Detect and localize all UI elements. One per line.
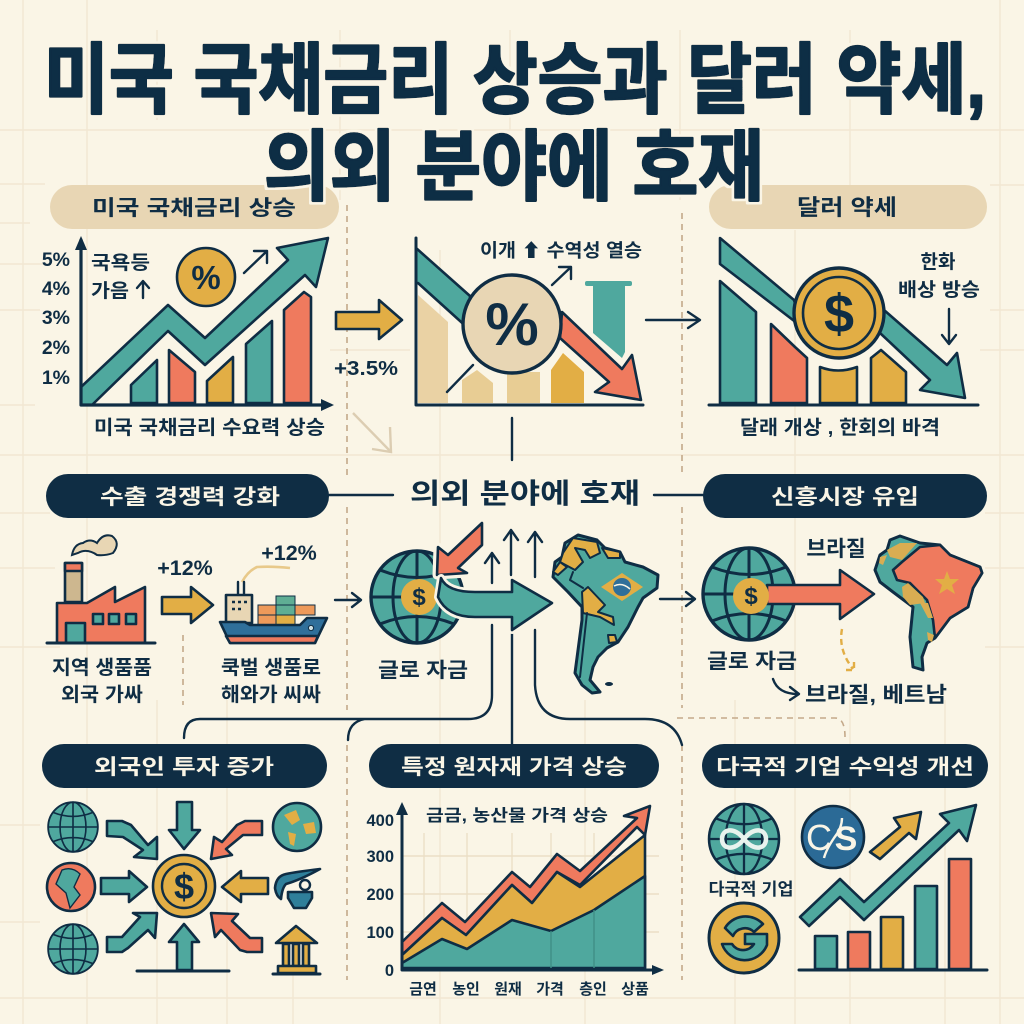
- arrow: down: [942, 309, 956, 344]
- arrow: coral inflow: [437, 523, 482, 575]
- icon: dollar: [733, 578, 769, 614]
- heading pill: multinationals: [702, 744, 988, 788]
- note: won: [898, 251, 980, 301]
- chart: falling price: [416, 238, 643, 405]
- arrows: investment inflow: [101, 802, 268, 971]
- arrow: coral to Brazil: [767, 570, 874, 619]
- chart: rising yield: 5%: [42, 249, 70, 271]
- chart: commodity area: 300: [366, 848, 394, 866]
- note: won: 한화: [921, 251, 955, 273]
- caption: global goods: 쿡벌 생품로: [221, 657, 321, 679]
- panel: global funds flow: [371, 523, 658, 693]
- heading pill: weak dollar: 달러 약세: [797, 195, 897, 220]
- label: Brazil Vietnam: 브라질, 베트남: [805, 683, 947, 707]
- panel: multinational profits: [702, 744, 988, 973]
- arrows: small up: [485, 530, 542, 583]
- arrow: to globe: [335, 593, 361, 607]
- line: ship smoke: [242, 567, 290, 582]
- chart: rising yield: 4%: [42, 278, 70, 300]
- map: South America coral: [875, 536, 982, 670]
- chart: commodity area: 원재: [494, 981, 522, 998]
- icon: percent badge: %: [191, 259, 221, 296]
- center heading: 의외 분야에 호재: [410, 478, 640, 509]
- caption: local goods: [52, 657, 152, 706]
- label: +12%: +12%: [157, 556, 213, 580]
- heading pill: foreign investment: [42, 744, 327, 788]
- chart: commodity area: 0: [385, 962, 394, 980]
- panel: foreign investment: [42, 744, 327, 974]
- panel: emerging market inflow: [703, 474, 987, 707]
- icon: central coin: [153, 855, 215, 917]
- chart: rising yield: 2%: [42, 337, 70, 359]
- arrow: to dollar panel: [646, 312, 700, 328]
- heading pill: foreign investment: 외국인 투자 증가: [94, 756, 274, 779]
- line: pointer: [447, 365, 473, 392]
- heading pill: emerging: [703, 474, 987, 518]
- label: +3.5%: +3.5%: [334, 358, 398, 380]
- arrow: small up: [552, 267, 571, 285]
- caption: global goods: 해와가 씨싸: [221, 684, 321, 706]
- chart: commodity area: 층인: [579, 981, 607, 998]
- label: yield: 이개 ⬆ 수역성 열승: [480, 240, 642, 261]
- heading pill: commodities: [369, 744, 659, 788]
- caption: local goods: 지역 생품품: [52, 657, 152, 679]
- heading pill: export: [46, 474, 329, 518]
- map: South America with flag: [553, 535, 658, 693]
- chart: falling dollar: [709, 238, 978, 405]
- panel: US treasury yield rise: [42, 185, 339, 439]
- arrow: gold: [162, 587, 213, 623]
- label: +12%: +12%: [261, 541, 317, 565]
- arrow: teal outflow: [438, 578, 552, 630]
- chart: commodity area: 금연: [409, 981, 437, 998]
- heading pill: export: 수출 경쟁력 강화: [100, 486, 280, 509]
- arrow: gold up: [870, 812, 921, 859]
- icon: cargo ship: [220, 582, 327, 643]
- chart: rising yield: 1%: [42, 367, 70, 389]
- chart: commodity area: [366, 802, 664, 998]
- panel: export competitiveness: [46, 474, 329, 706]
- icon: C/S logo: [802, 806, 864, 868]
- icon: factory: [47, 535, 155, 643]
- icon: fin and mortar: [275, 869, 320, 908]
- title: 의외 분야에 호재: [264, 125, 764, 211]
- arrow: to bond panel: [336, 300, 402, 339]
- icon: teal bar marker: [585, 281, 632, 358]
- icon: G coin: [709, 903, 779, 973]
- icon: C/S logo: C: [806, 817, 832, 858]
- caption: local goods: 외국 가싸: [61, 684, 143, 706]
- section divider dashes: [183, 205, 845, 980]
- arrow: to emerging panel: [660, 592, 695, 606]
- caption: global funds: 글로 자금: [378, 659, 468, 682]
- chart: commodity area: 200: [366, 886, 394, 904]
- heading pill: commodities: 특정 원자재 가격 상승: [401, 756, 627, 779]
- note: demand up: 가음: [91, 280, 129, 302]
- icon: percent badge: [177, 248, 235, 306]
- chart: commodity area: 100: [366, 924, 394, 942]
- arrow: curved small: [773, 679, 799, 700]
- caption: global goods: [221, 657, 321, 706]
- icon: globe with dollar: [703, 548, 795, 640]
- chart: rising yield: [42, 236, 334, 411]
- panel: commodity prices: [366, 744, 664, 998]
- caption: demand: 미국 국채금리 수요력 상승: [94, 417, 325, 439]
- icon: dollar coin: $: [824, 284, 854, 344]
- icon: bank: [273, 926, 320, 974]
- chart title: 금금, 농산물 가격 상승: [426, 806, 608, 825]
- icon: central coin: $: [174, 866, 194, 907]
- label: Brazil: 브라질: [806, 537, 866, 561]
- chart: commodity area: 400: [366, 812, 394, 830]
- chart: commodity area: 농인: [452, 981, 480, 998]
- arrow: faint diagonal: [353, 413, 391, 452]
- note: demand up: [91, 252, 150, 302]
- heading pill: emerging: 신흥시장 유입: [771, 486, 919, 509]
- icons: source globes: [47, 802, 321, 974]
- arrow: dashed gold: [841, 629, 854, 670]
- panel: bond price fall: [416, 238, 643, 405]
- heading pill: multinationals: 다국적 기업 수익성 개선: [716, 756, 974, 779]
- icon: percent circle: [463, 275, 561, 373]
- chart: profits: [799, 805, 987, 970]
- note: won: 배상 방승: [898, 279, 980, 301]
- label: multinational: 다국적 기업: [708, 880, 794, 899]
- heading pill: weak dollar: [709, 185, 987, 229]
- chart: commodity area: 상품: [621, 981, 649, 998]
- chart: rising yield: 3%: [42, 307, 70, 329]
- caption: global funds: 글로 자금: [707, 650, 797, 673]
- panel: weak dollar: [709, 185, 987, 439]
- arrow: small up: [244, 251, 267, 273]
- chart: commodity area: 가격: [536, 981, 564, 998]
- note: demand up: 국욕등: [91, 252, 150, 274]
- heading pill: US treasury yield rise: 미국 국채금리 상승: [92, 197, 296, 220]
- icon: percent circle: %: [485, 291, 539, 358]
- icon: dollar coin: [794, 268, 884, 358]
- caption: dollar: 달래 개상 , 한회의 바격: [740, 417, 940, 439]
- icon: infinity globe: [709, 804, 779, 874]
- icon: C/S logo: S: [835, 820, 857, 858]
- connector lines: [184, 418, 703, 745]
- icon: globe with dollar: [371, 551, 463, 643]
- heading pill: US treasury yield rise: [50, 185, 339, 229]
- title: [44, 38, 986, 211]
